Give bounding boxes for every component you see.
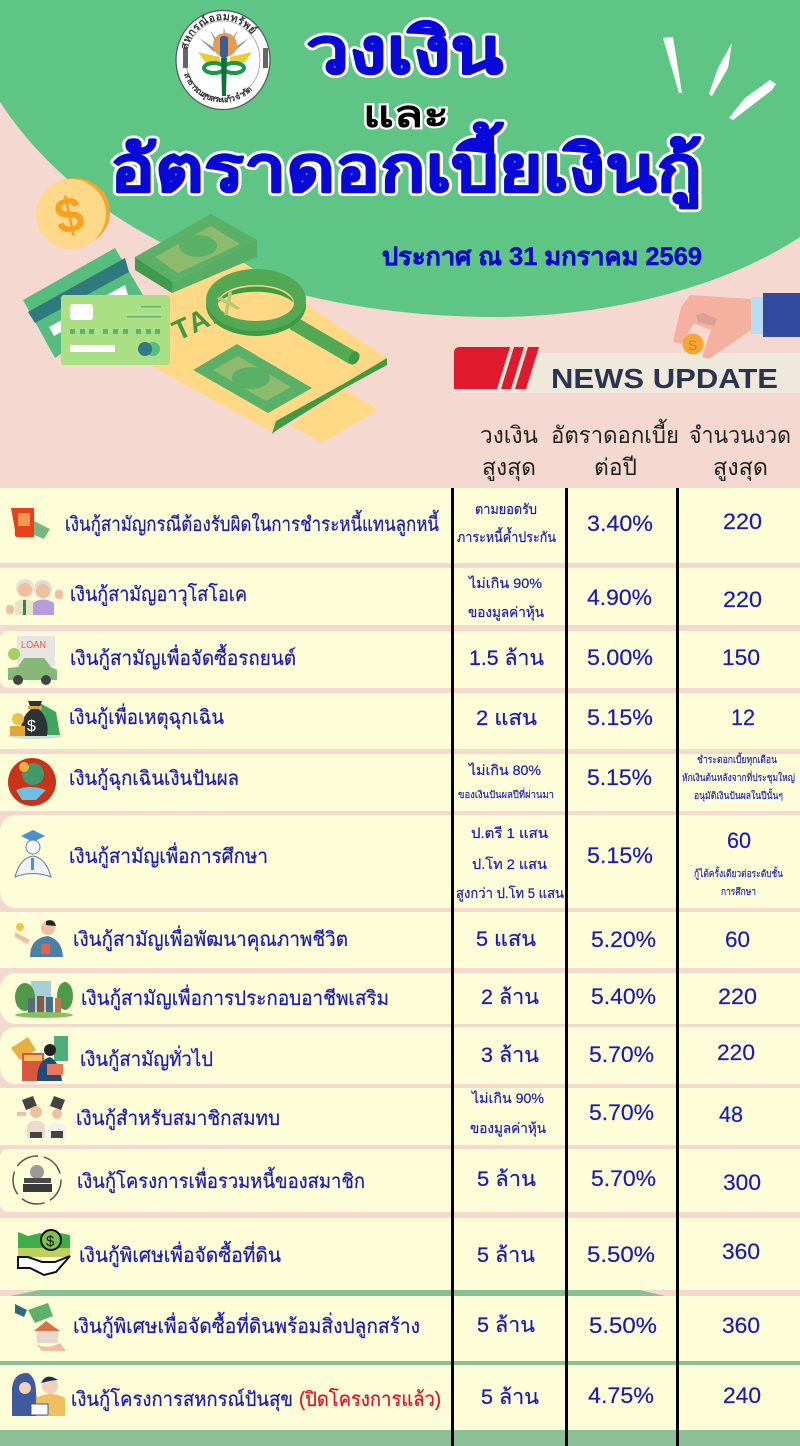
icon: calculator and woman (11, 1036, 68, 1081)
icon: circular bank (13, 1156, 61, 1204)
row 7: quality of life loan: เงินกู้สามัญเพื่อพัฒนาคุณภาพชีวิต (73, 925, 348, 952)
green header shape (0, 0, 800, 317)
row 4: emergency loan (8, 701, 755, 739)
icon: group with trees (15, 981, 73, 1018)
row 5: dividend emergency loan: ไม่เกิน 80% (468, 762, 541, 778)
icon: graduate (15, 830, 51, 877)
row 1: guarantor loan: เงินกู้สามัญกรณีต้องรับผิดในการชำระหนี้แทนลูกหนี้ (65, 510, 439, 537)
news update banner (454, 347, 800, 394)
row 7: quality of life loan: 60 (725, 927, 750, 952)
sparkle lines (663, 37, 776, 120)
row 9: general loan: เงินกู้สามัญทั่วไป (80, 1045, 213, 1072)
row 11: debt consolidation loan: 300 (723, 1170, 761, 1195)
icon: hand holding land: $ (46, 1233, 55, 1250)
icon: magnifying glass: X (213, 285, 244, 321)
icon: cooperative logo (175, 10, 271, 110)
icon: back credit card (23, 248, 143, 358)
icon: money bag (8, 701, 62, 739)
row 7: quality of life loan (15, 920, 750, 957)
row 8: supplementary occupation loan: 220 (718, 984, 757, 1009)
icon: hands with house (15, 1303, 66, 1351)
news update banner: NEWS UPDATE (551, 363, 778, 394)
row 7: quality of life loan: 5 แสน (476, 928, 536, 951)
icon: gold coin (36, 178, 110, 249)
row 14: Sahakorn Pansuk loan: 240 (723, 1383, 761, 1408)
announcement date: ประกาศ ณ 31 มกราคม 2569 (382, 243, 702, 271)
icon: two women (12, 1373, 65, 1416)
icon: cooperative logo: สหกรณ์ออมทรัพย์ (182, 14, 259, 49)
row 5: dividend emergency loan: ชำระดอกเบี้ยทุกเดือน (697, 752, 777, 766)
row 12: land purchase loan: 5 ล้าน (477, 1244, 535, 1267)
row 1: guarantor loan: ภาระหนี้ค้ำประกัน (457, 527, 556, 545)
title: and: และ (363, 94, 449, 136)
row 6: education loan: สูงกว่า ป.โท 5 แสน (456, 885, 564, 902)
row 6: education loan: การศึกษา (721, 886, 756, 898)
icon: flat banknote (193, 344, 312, 413)
row 4: emergency loan: 5.15% (587, 705, 653, 730)
row 12: land purchase loan: เงินกู้พิเศษเพื่อจัดซื้อที่ดิน (79, 1241, 281, 1268)
row 14: Sahakorn Pansuk loan: 5 ล้าน (481, 1386, 539, 1409)
row 2: elderly loan: ไม่เกิน 90% (468, 575, 542, 591)
row 11: debt consolidation loan: 5 ล้าน (477, 1168, 536, 1191)
row 1: guarantor loan: 220 (723, 509, 762, 534)
icon: front credit card (61, 295, 170, 365)
icon: car loan: LOAN (21, 640, 46, 651)
row 3: car loan: 5.00% (587, 645, 653, 670)
row 2: elderly loan: ของมูลค่าหุ้น (468, 604, 544, 621)
row 11: debt consolidation loan: 5.70% (591, 1166, 656, 1191)
row 6: education loan: เงินกู้สามัญเพื่อการศึกษา (69, 842, 268, 869)
row 13: land and building loan: เงินกู้พิเศษเพื่อจัดซื้อที่ดินพร้อมสิ่งปลูกสร้าง (73, 1312, 420, 1339)
row 10: associate member loan: ของมูลค่าหุ้น (470, 1120, 546, 1137)
icon: hand dropping coin: S (688, 337, 697, 353)
row 2: elderly loan: 220 (723, 587, 762, 612)
title: loan interest rate: อัตราดอกเบี้ยเงินกู้ (110, 122, 702, 209)
icon: gold coin: $ (50, 185, 89, 245)
row 1: guarantor loan (11, 501, 762, 545)
row 3: car loan: 150 (722, 645, 760, 670)
row 5: dividend emergency loan: อนุมัติเงินปันผลในปีนั้นๆ (694, 788, 783, 802)
green divider above row 13 (10, 1290, 665, 1296)
row 10: associate member loan (17, 1090, 743, 1138)
icon: hand dropping coin (673, 293, 800, 359)
bottom green band (0, 1361, 800, 1446)
row 6: education loan: กู้ได้ครั้งเดียวต่อระดับชั้น (694, 866, 783, 880)
icon: red document (11, 508, 50, 539)
row 4: emergency loan: 2 แสน (476, 707, 537, 730)
row 6: education loan: 60 (727, 828, 751, 853)
row 8: supplementary occupation loan (15, 981, 757, 1018)
row 3: car loan (8, 636, 760, 685)
row 2: elderly loan (6, 575, 762, 621)
table rows background (0, 488, 800, 1430)
icon: hand holding land (18, 1230, 70, 1275)
icon: car loan (8, 636, 57, 685)
row 6: education loan: ป.ตรี 1 แสน (471, 825, 548, 841)
icon: hand with globe (8, 758, 56, 806)
icon: magnifying glass (206, 269, 362, 367)
row 13: land and building loan (15, 1303, 760, 1351)
row 6: education loan: ป.โท 2 แสน (472, 856, 547, 872)
row 8: supplementary occupation loan: 2 ล้าน (481, 986, 539, 1009)
row 9: general loan: 5.70% (589, 1042, 654, 1067)
table column headings: วงเงิน (480, 422, 538, 448)
icon: tax document: TAX (167, 293, 235, 346)
row 12: land purchase loan: 5.50% (587, 1242, 655, 1267)
row 14: Sahakorn Pansuk loan: (ปิดโครงการแล้ว) (299, 1388, 441, 1411)
row 5: dividend emergency loan: เงินกู้ฉุกเฉินเงินปันผล (69, 768, 239, 791)
table column headings: จำนวนงวด (689, 422, 791, 448)
row 9: general loan: 220 (717, 1040, 755, 1065)
row 6: education loan: 5.15% (587, 843, 653, 868)
table column headings: สูงสุด (713, 454, 768, 481)
row 4: emergency loan: 12 (731, 705, 755, 730)
row 13: land and building loan: 5.50% (589, 1313, 657, 1338)
column divider lines (451, 488, 679, 1446)
row 10: associate member loan: 48 (719, 1102, 743, 1127)
row 13: land and building loan: 5 ล้าน (477, 1314, 535, 1337)
row 8: supplementary occupation loan: 5.40% (591, 984, 656, 1009)
row 13: land and building loan: 360 (722, 1313, 760, 1338)
row 1: guarantor loan: 3.40% (587, 511, 653, 536)
row 6: education loan (15, 825, 783, 902)
icon: tax document (153, 257, 387, 443)
table column headings: อัตราดอกเบี้ย (551, 419, 679, 448)
row 1: guarantor loan: ตามยอดรับ (475, 501, 537, 517)
row 11: debt consolidation loan: เงินกู้โครงการเพื่อรวมหนี้ของสมาชิก (77, 1167, 365, 1194)
table column headings: ต่อปี (594, 454, 637, 480)
row 7: quality of life loan: 5.20% (591, 927, 656, 952)
icon: elderly couple (6, 579, 63, 615)
row 5: dividend emergency loan: ของเงินปันผลปีที่ผ่านมา (458, 787, 554, 801)
row 5: dividend emergency loan: 5.15% (587, 765, 652, 790)
icon: cooperative logo: สาธารณสุขสระแก้ว จำกัด (184, 72, 252, 102)
title: credit limit: วงเงิน (306, 15, 503, 87)
row 10: associate member loan: เงินกู้สำหรับสมาชิกสมทบ (76, 1108, 280, 1131)
row 12: land purchase loan: 360 (722, 1239, 760, 1264)
row 10: associate member loan: 5.70% (589, 1100, 654, 1125)
icon: two associates (17, 1096, 66, 1138)
table column headings: สูงสุด (482, 454, 536, 481)
row 10: associate member loan: ไม่เกิน 90% (471, 1090, 544, 1106)
row 2: elderly loan: 4.90% (587, 585, 652, 610)
title: credit limit: วงเงิน (306, 15, 503, 87)
row 12: land purchase loan (18, 1230, 760, 1275)
row 9: general loan: 3 ล้าน (481, 1044, 539, 1067)
table column headings (480, 419, 791, 481)
icon: person with idea (15, 920, 63, 957)
row 14: Sahakorn Pansuk loan: เงินกู้โครงการสหกรณ์ปันสุข (71, 1388, 293, 1412)
icon: money bag: $ (27, 718, 36, 735)
row 14: Sahakorn Pansuk loan: 4.75% (588, 1383, 654, 1408)
row 4: emergency loan: เงินกู้เพื่อเหตุฉุกเฉิน (69, 703, 224, 730)
icon: cash stack (135, 214, 257, 293)
row 3: car loan: เงินกู้สามัญเพื่อจัดซื้อรถยนต์ (70, 644, 296, 671)
row 2: elderly loan: เงินกู้สามัญอาวุโสโอเค (70, 583, 247, 607)
row 11: debt consolidation loan (13, 1156, 761, 1204)
row 3: car loan: 1.5 ล้าน (469, 647, 544, 670)
title: loan interest rate: อัตราดอกเบี้ยเงินกู้ (110, 122, 702, 209)
row 14: Sahakorn Pansuk loan (12, 1373, 761, 1416)
row 9: general loan (11, 1036, 755, 1081)
row 8: supplementary occupation loan: เงินกู้สามัญเพื่อการประกอบอาชีพเสริม (81, 984, 389, 1011)
row 5: dividend emergency loan (8, 752, 795, 806)
